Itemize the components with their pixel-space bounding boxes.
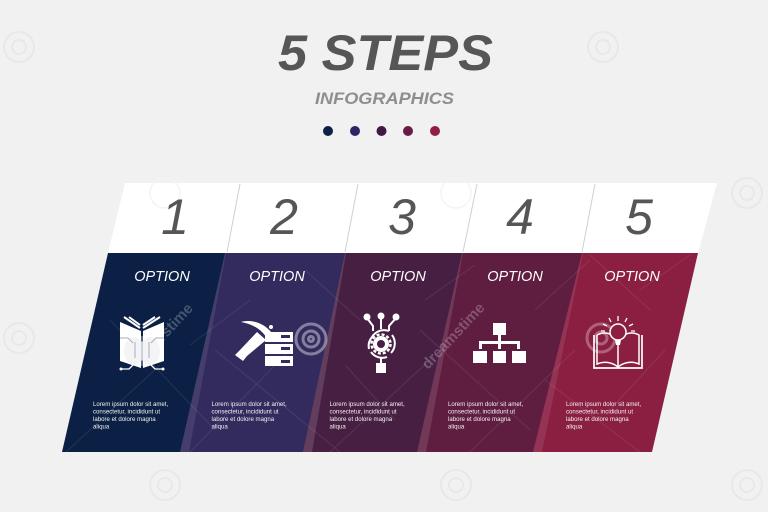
description text: step 4: Lorem ipsum dolor sit amet, [448,401,523,408]
icon: open book with light bulb [594,316,642,368]
description text: step 1: consectetur, incididunt ut [93,408,160,416]
option labels: OPTION [249,269,305,285]
description text: step 2: Lorem ipsum dolor sit amet, [212,401,287,408]
panel: step 4 [417,253,583,452]
description text: step 4: consectetur, incididunt ut [448,408,515,416]
panel: step 1 [62,253,226,452]
subtitle: INFOGRAPHICS [315,89,455,108]
option labels: OPTION [370,269,426,285]
description text: step 3: aliqua [330,424,346,430]
description text: step 1: Lorem ipsum dolor sit amet, [93,401,168,408]
description text: step 2: aliqua [212,424,228,430]
watermark lines [66,255,690,452]
description text: step 4 [448,401,523,430]
watermark text: step 4: dreamstime [418,300,488,373]
description text: step 1: labore et dolore magna [93,416,156,423]
panel: step 3 [303,253,463,452]
icon: gear with network [364,312,400,373]
description text: step 5 [566,401,641,430]
watermark text: step 1: rstime [153,300,197,345]
icon: book with brain [120,317,164,370]
description text: step 3: Lorem ipsum dolor sit amet, [330,401,405,408]
description text: step 3: labore et dolore magna [330,416,393,423]
description text: step 5: aliqua [566,424,583,430]
watermark spiral: step 5 [587,324,615,352]
description text: step 5: consectetur, incididunt ut [566,408,633,416]
option labels [134,269,660,285]
step numbers: 2 [269,189,298,245]
icon: pickaxe and server [235,321,293,366]
description text: step 1 [93,401,168,430]
description text: step 4: labore et dolore magna [448,416,511,423]
watermark spiral: step 2 [296,324,326,354]
step numbers [161,189,653,245]
step numbers: 5 [625,189,653,245]
panel edge highlights [180,253,583,452]
title: 5 STEPS [278,25,493,81]
option labels: OPTION [604,269,660,285]
header band [108,178,717,253]
description text: step 5: Lorem ipsum dolor sit amet, [566,401,641,408]
description text: step 2: labore et dolore magna [212,416,275,423]
description text: step 2: consectetur, incididunt ut [212,408,279,416]
icon: hierarchy [473,323,526,363]
description text: step 1: aliqua [93,424,110,430]
panel: step 5 [533,253,698,452]
step numbers: 1 [161,189,189,245]
option labels: OPTION [134,269,190,285]
step numbers: 4 [506,189,534,245]
progress dots [323,126,440,136]
description text: step 5: labore et dolore magna [566,416,629,423]
step numbers: 3 [388,189,416,245]
panel: step 2 [180,253,346,452]
description text: step 3: consectetur, incididunt ut [330,408,397,416]
description text: step 4: aliqua [448,424,465,430]
option labels: OPTION [487,269,543,285]
description text: step 2 [212,401,287,430]
description text: step 3 [330,401,405,430]
